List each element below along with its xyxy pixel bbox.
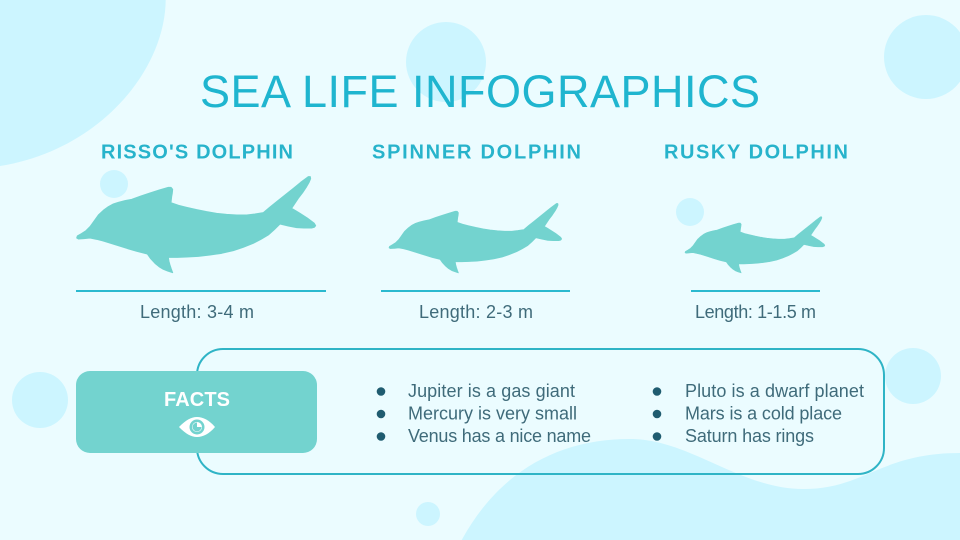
label: length 1-1.5 m: Length: 1-1.5 m	[695, 302, 816, 322]
rule: medium dolphin	[381, 290, 570, 292]
list: right facts	[653, 381, 864, 446]
icon: eye	[179, 417, 215, 437]
list: left facts: Jupiter is a gas giant	[408, 381, 575, 401]
heading: rusky dolphin: RUSKY DOLPHIN	[664, 142, 848, 164]
icon: medium dolphin	[389, 204, 562, 273]
label: length 3-4 m: Length: 3-4 m	[140, 302, 254, 322]
panel: facts badge	[76, 371, 317, 453]
panel: spinner dolphin	[372, 142, 581, 322]
rule: large dolphin	[76, 290, 326, 292]
panel: Risso's dolphin	[76, 142, 326, 322]
list: right facts: Saturn has rings	[685, 426, 814, 446]
heading: Risso's dolphin: RISSO'S DOLPHIN	[101, 142, 293, 164]
icon: small dolphin	[685, 217, 825, 273]
icon: large dolphin	[77, 177, 316, 273]
list: right facts: Mars is a cold place	[685, 404, 842, 424]
list: left facts: Venus has a nice name	[408, 426, 591, 446]
panel: rusky dolphin	[664, 142, 848, 322]
rule: small dolphin	[691, 290, 820, 292]
title: SEA LIFE INFOGRAPHICS	[200, 66, 760, 117]
list: left facts	[377, 381, 591, 446]
list: left facts: Mercury is very small	[408, 404, 577, 424]
panel: facts outline	[197, 349, 884, 474]
list: right facts: Pluto is a dwarf planet	[685, 381, 864, 401]
heading: facts: FACTS	[164, 389, 230, 411]
heading: spinner dolphin: SPINNER DOLPHIN	[372, 142, 581, 164]
label: length 2-3 m: Length: 2-3 m	[419, 302, 533, 322]
